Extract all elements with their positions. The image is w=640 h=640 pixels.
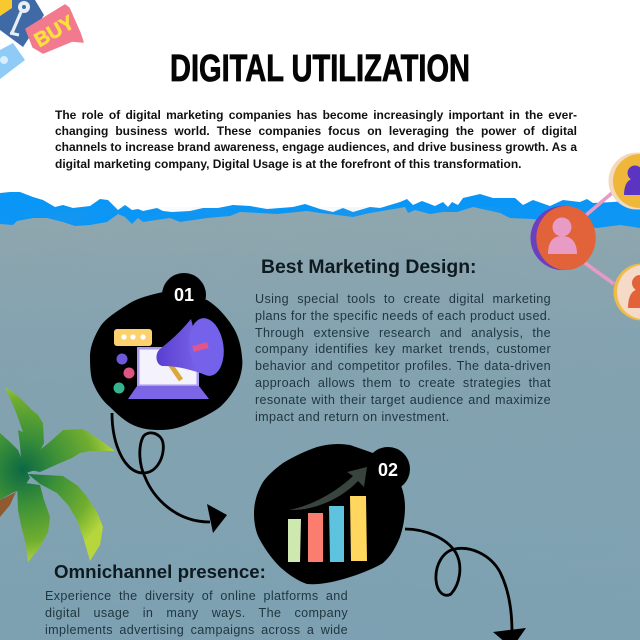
step 01 blob: [90, 273, 242, 430]
text: best marketing design: behavior and competitor profiles. The data-driven: [255, 359, 551, 373]
intro paragraph: digital marketing company, Digital Usage is at the forefront of this transformation.: [55, 157, 522, 171]
step 02 blob: [254, 444, 410, 584]
text: omnichannel presence: Experience the diversity of online platforms and: [45, 589, 348, 603]
title: DIGITAL UTILIZATION: [170, 48, 470, 90]
step number 02: 02: [378, 460, 398, 480]
text: best marketing design: [255, 292, 551, 424]
icon: growth arrow: [289, 467, 367, 510]
torn paper band: [0, 192, 640, 640]
text: best marketing design: impact and return on investment.: [255, 410, 450, 424]
text: best marketing design: Using special tools to create digital marketing: [255, 292, 551, 306]
intro paragraph: changing business world. These companies focus on leveraging the power of digital: [55, 124, 577, 138]
bar chart: [288, 496, 367, 562]
arrow: step 02 onward: [405, 529, 526, 640]
intro paragraph: The role of digital marketing companies has become increasingly important in the ever-: [55, 108, 577, 122]
heading: best marketing design: Best Marketing Design:: [261, 256, 476, 278]
step number 01: 01: [174, 285, 194, 305]
icon: marketing stickers: BUY: [31, 11, 79, 52]
text: best marketing design: company identifies key market trends, customer: [255, 342, 551, 356]
text: best marketing design: approach allows them to create strategies that: [255, 376, 551, 390]
intro paragraph: [55, 108, 578, 171]
icon: laptop with megaphone: [114, 316, 227, 399]
icon: person bottom: [614, 264, 640, 320]
text: omnichannel presence: [45, 589, 348, 637]
text: omnichannel presence: digital usage in many ways. The company: [45, 606, 348, 620]
palm tree: [0, 387, 115, 562]
network icon: [530, 152, 640, 320]
heading: omnichannel presence: Omnichannel presence:: [54, 561, 266, 582]
icon: person main: [530, 206, 596, 270]
text: best marketing design: resonate with their target audience and maximize: [255, 393, 551, 407]
intro paragraph: channels to increase brand awareness, engage audiences, and drive business growth. As a: [55, 140, 577, 154]
text: omnichannel presence: implements advertising campaigns across a wide: [45, 623, 348, 637]
text: best marketing design: plans for the specific needs of each product used.: [255, 309, 551, 323]
text: best marketing design: Through extensive research and analysis, the: [255, 326, 551, 340]
icon: marketing stickers: [0, 0, 83, 79]
arrow: step 01 to step 02: [112, 413, 227, 533]
icon: person top: [608, 152, 640, 210]
